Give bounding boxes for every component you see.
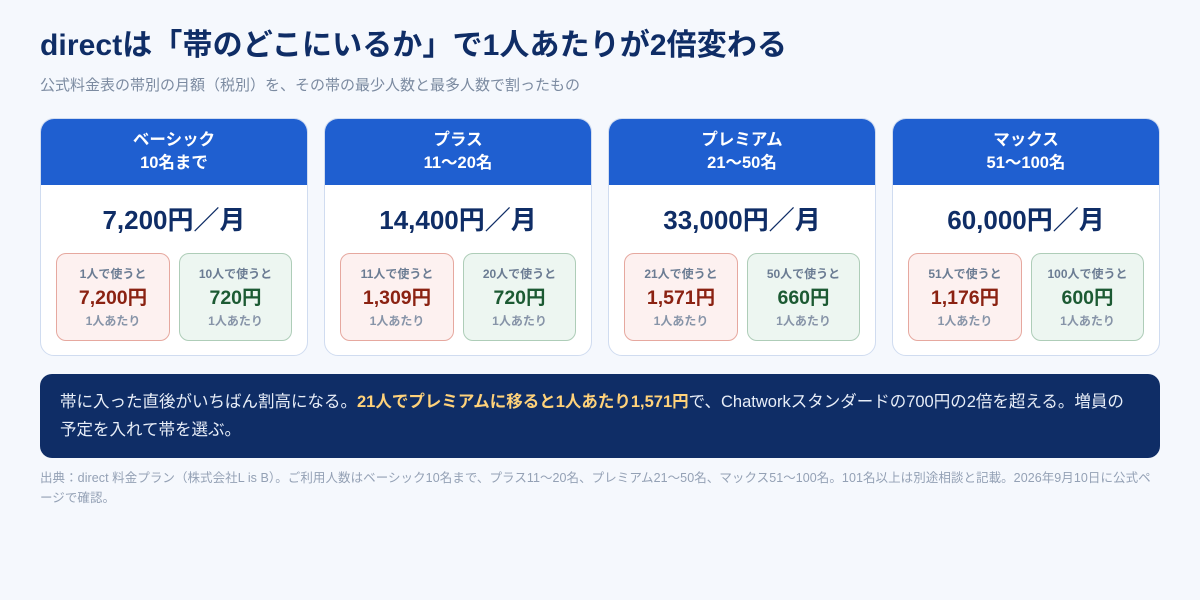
plan header: プレミアム — [701, 131, 783, 149]
maximum users box: 20人で使うと — [483, 267, 556, 281]
minimum users box: 1,309円 — [363, 287, 431, 309]
minimum users box — [56, 253, 170, 341]
plan header: 21〜50名 — [707, 154, 777, 172]
maximum users box: 50人で使うと — [767, 267, 840, 281]
minimum users box: 51人で使うと — [928, 267, 1002, 281]
maximum users box: 10人で使うと — [199, 267, 272, 281]
maximum users box: 1人あたり — [776, 314, 831, 328]
maximum users box: 100人で使うと — [1047, 267, 1128, 281]
plan header: マックス — [993, 131, 1059, 149]
panel: プラス — [324, 118, 592, 356]
minimum users box: 1人あたり — [938, 314, 992, 328]
maximum users box: 600円 — [1061, 287, 1114, 309]
panel: プレミアム — [608, 118, 876, 356]
minimum users box: 1人あたり — [86, 314, 140, 328]
plan header: ベーシック — [133, 131, 215, 149]
minimum users box: 1,571円 — [647, 287, 715, 309]
monthly price: 7,200円／月 — [102, 205, 246, 235]
monthly price: 60,000円／月 — [947, 205, 1105, 235]
minimum users box: 7,200円 — [79, 287, 147, 309]
maximum users box — [463, 253, 576, 341]
minimum users box: 1,176円 — [931, 287, 999, 309]
maximum users box — [179, 253, 292, 341]
minimum users box — [340, 253, 454, 341]
plan header: 11〜20名 — [424, 154, 492, 172]
maximum users box — [747, 253, 860, 341]
minimum users box: 11人で使うと — [361, 267, 433, 281]
callout: 帯に入った直後がいちばん割高になる。21人でプレミアムに移ると1人あたり1,571円で、Chatworkスタンダードの700円の2倍を超える。増員の予定を入れて帯を選ぶ。 — [60, 393, 1124, 439]
plan header — [325, 119, 591, 185]
maximum users box: 660円 — [777, 287, 830, 309]
minimum users box: 1人あたり — [654, 314, 708, 328]
monthly price: 14,400円／月 — [379, 205, 537, 235]
maximum users box: 1人あたり — [1060, 314, 1115, 328]
maximum users box: 1人あたり — [208, 314, 263, 328]
panel: ベーシック — [40, 118, 308, 356]
maximum users box: 720円 — [493, 287, 546, 309]
plan header — [609, 119, 875, 185]
plan header: 51〜100名 — [987, 154, 1065, 172]
maximum users box: 1人あたり — [492, 314, 547, 328]
subtitle: 公式料金表の帯別の月額（税別）を、その帯の最少人数と最多人数で割ったもの — [40, 77, 580, 94]
source note: 出典：direct 料金プラン（株式会社L is B）。ご利用人数はベーシック10名まで、プラス11〜20名、プレミアム21〜50名、マックス51〜100名。101名以上は別途相談と記載。2026年9月10日に公式ページで確認。 — [40, 471, 1151, 505]
minimum users box: 21人で使うと — [644, 267, 718, 281]
minimum users box: 1人で使うと — [80, 267, 146, 281]
plan header — [41, 119, 307, 185]
minimum users box: 1人あたり — [370, 314, 424, 328]
panel: マックス — [892, 118, 1160, 356]
monthly price: 33,000円／月 — [663, 205, 821, 235]
minimum users box — [624, 253, 738, 341]
title: directは「帯のどこにいるか」で1人あたりが2倍変わる — [40, 29, 787, 62]
minimum users box — [908, 253, 1022, 341]
maximum users box — [1031, 253, 1144, 341]
plan header: プラス — [433, 131, 483, 149]
plan header: 10名まで — [140, 154, 208, 172]
plan header — [893, 119, 1159, 185]
maximum users box: 720円 — [209, 287, 262, 309]
callout — [40, 374, 1160, 458]
